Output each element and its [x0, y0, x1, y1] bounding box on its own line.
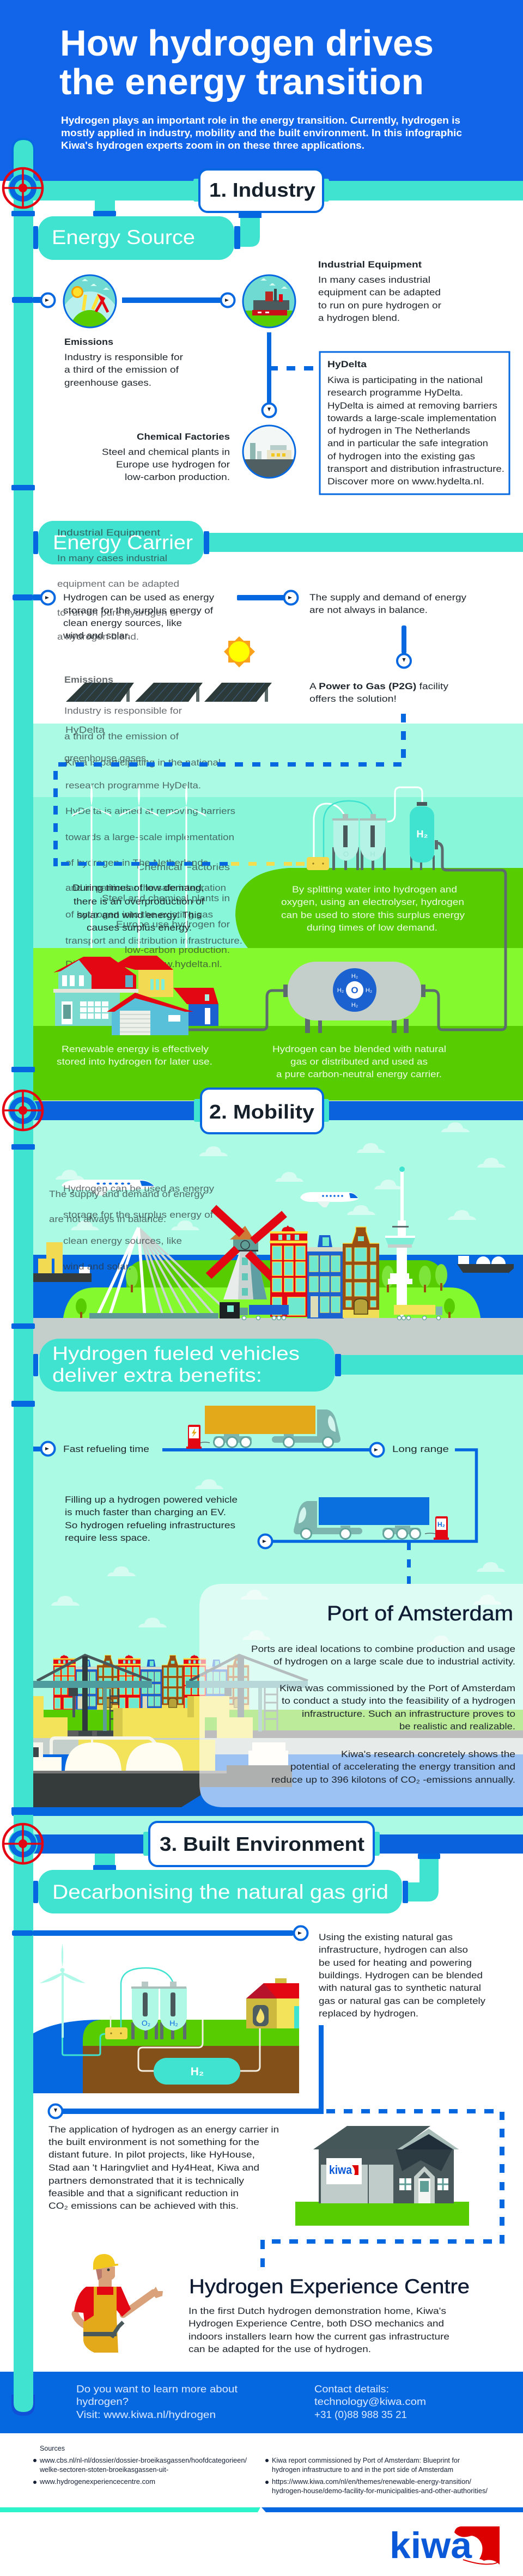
footer text: contact details: technology@kiwa.com: [314, 2396, 426, 2407]
footer text: contact details: +31 (0)88 988 35 21: [314, 2409, 407, 2420]
text: splitting water: oxygen, using an electrolyser, hydrogen: [281, 897, 464, 907]
text: storage for surplus energy: storage for the surplus energy of: [63, 605, 213, 616]
sources: www.cbs.nl/nl-nl/dossier/dossier-broeikasgassen/hoofdcategorieen/: [39, 2456, 247, 2464]
chemical factories text: low-carbon production.: [125, 472, 230, 482]
horizontal teal pipe: industry: [33, 181, 523, 201]
footer text: learn more: hydrogen?: [76, 2396, 129, 2407]
illustration: underground hydrogen system: O₂: [142, 2019, 150, 2027]
chemical factories text: Chemical Factories: [137, 432, 230, 442]
text: filling up: require less space.: [65, 1533, 150, 1543]
pipe to energy carrier: [209, 533, 523, 552]
panel: Port of Amsterdam: to conduct a study into the feasibility of a hydrogen: [282, 1696, 515, 1706]
sources: welke-sectoren-stoten-broeikasgassen-uit-: [39, 2465, 168, 2474]
panel heading: hydrogen fueled vehicles: deliver extra benefits:: [52, 1365, 262, 1386]
electrolyser with hydrogen tank: H₂: [416, 829, 428, 840]
emissions text: a third of the emission of: [64, 364, 179, 375]
illustration: Kiwa hydrogen house: kiwa: [329, 2163, 352, 2177]
electrolyser with hydrogen tank: H: [370, 850, 375, 858]
icon: emissions: [64, 276, 115, 327]
repeated text: emissions and hydelta: Discover more on www.hydelta.nl.: [65, 959, 222, 969]
text: surplus energy: solar and wind energy. This: [77, 910, 202, 920]
overlapping repeated text: industrial equipment: a hydrogen blend.: [57, 631, 139, 642]
footer text: learn more: Do you want to learn more about: [76, 2384, 238, 2395]
chemical factories text: [102, 432, 230, 482]
panel: HyDelta: HyDelta is aimed at removing barriers: [327, 400, 497, 411]
chemical factories text: Europe use hydrogen for: [116, 459, 230, 470]
section heading: 2. Mobility: 2. Mobility: [209, 1101, 314, 1123]
intro text: [61, 115, 462, 151]
text: storage for surplus energy: wind and solar.: [63, 630, 130, 641]
illustration: electric truck with charger: [186, 1406, 340, 1449]
clouds: [56, 1122, 506, 1230]
panel: Port of Amsterdam: Port of Amsterdam: [327, 1602, 513, 1625]
text: existing natural gas infrastructure: gas or natural gas can be completely: [319, 1996, 486, 2006]
sources: Sources: [40, 2444, 65, 2452]
panel heading: hydrogen fueled vehicles: Hydrogen fueled vehicles: [52, 1343, 300, 1364]
text: application in the built environment: The application of hydrogen as an energy carrier in: [48, 2124, 279, 2135]
text: surplus energy: During times of low demand,: [72, 883, 204, 893]
logo: Kiwa: kiwa: [390, 2525, 472, 2566]
text: application in the built environment: distant future. In pilot projects, like HyHouse,: [48, 2149, 255, 2160]
panel heading: Energy Source: [33, 216, 240, 260]
sources: https://www.kiwa.com/nl/en/themes/renewable-energy-transition/: [272, 2477, 471, 2486]
sources: Kiwa report commissioned by Port of Amsterdam: Blueprint for: [272, 2456, 460, 2464]
text: existing natural gas infrastructure: Using the existing natural gas: [319, 1932, 453, 1942]
repeated text over city: are not always in balance.: [49, 1214, 166, 1224]
dashed line to hydrogen house: [260, 2109, 504, 2267]
yellow dashes: [231, 862, 305, 866]
electrolyser with hydrogen tank: O: [343, 850, 349, 858]
repeated text: emissions and hydelta: research programme HyDelta.: [65, 780, 201, 791]
text: existing natural gas infrastructure: be used for heating and powering: [319, 1958, 472, 1968]
mobility background: [33, 1120, 523, 1807]
illustration: Euromast tower: [385, 1167, 415, 1317]
dashed line: solar to electrolyser: [53, 714, 406, 866]
overlapping repeated text: industrial equipment: [57, 527, 179, 642]
panel: Port of Amsterdam: be realistic and realizable.: [399, 1721, 515, 1731]
footer text: contact details: Contact details:: [314, 2384, 389, 2395]
panel: Port of Amsterdam: Kiwa's research concretely shows the: [341, 1749, 515, 1759]
benefit line and nodes: [33, 1442, 476, 1548]
illustration: aeroplanes: [62, 1180, 358, 1207]
repeated text: emissions and hydelta: low-carbon production.: [125, 945, 230, 955]
clouds: [51, 1479, 505, 1645]
emissions text: [64, 337, 183, 388]
section heading: 1. Industry: [193, 169, 329, 212]
benefit labels: Fast refueling time: [63, 1444, 149, 1454]
storage tank: H₂: [351, 973, 358, 980]
valve: mobility: [3, 1091, 42, 1130]
panel: Port of Amsterdam: of hydrogen on a large scale due to industrial activity.: [273, 1656, 515, 1667]
text: existing natural gas infrastructure: buildings. Hydrogen can be blended: [319, 1970, 483, 1980]
panel: HyDelta: [320, 352, 509, 494]
panel heading: Energy Carrier: [33, 521, 209, 564]
text: application in the built environment: feasible and that a significant reduction in: [48, 2188, 239, 2198]
main vertical teal pipe with collars: [11, 138, 35, 2416]
panel heading: Energy Source: Energy Source: [52, 226, 195, 248]
dashed line to port: [407, 1542, 411, 1584]
text: existing natural gas infrastructure: replaced by hydrogen.: [319, 2008, 418, 2019]
repeated text: emissions and hydelta: Emissions: [64, 675, 113, 685]
icon: solar panels: [66, 683, 272, 702]
text: surplus energy: causes surplus energy.: [87, 922, 192, 933]
connector line emissions to equipment: [12, 293, 234, 307]
industrial equipment text: to run on pure hydrogen or: [318, 300, 441, 311]
text: application in the built environment: Stad aan 't Haringvliet and Hy4Heat, Kiwa and: [48, 2162, 259, 2173]
storage tank: H₂: [366, 987, 372, 994]
text: existing natural gas infrastructure: with natural gas to synthetic natural: [318, 1983, 481, 1993]
text: surplus energy: [72, 883, 204, 933]
connector to power to gas: [397, 625, 411, 668]
panel: Port of Amsterdam: [199, 1584, 523, 1807]
icon: industrial equipment: [244, 276, 294, 327]
footer text: learn more: [76, 2384, 238, 2420]
text: stored for later use: [57, 1044, 212, 1067]
header background: [0, 0, 523, 181]
illustration: canal houses: [270, 1225, 379, 1319]
repeated text: emissions and hydelta: [64, 675, 242, 969]
repeated text over city: [49, 1183, 215, 1272]
panel: Port of Amsterdam: potential of accelerating the energy transition and: [290, 1761, 515, 1772]
title: [59, 23, 434, 102]
grey gas pipes: [188, 843, 506, 1030]
text: splitting water: By splitting water into hydrogen and: [292, 884, 457, 895]
panel: Port of Amsterdam: infrastructure. Such an infrastructure proves to: [302, 1709, 515, 1719]
text: demonstration home: In the first Dutch hydrogen demonstration home, Kiwa's: [188, 2306, 446, 2316]
intro text: Hydrogen plays an important role in the energy transition. Currently, hydrogen is: [61, 115, 460, 126]
illustration: underground hydrogen system: H₂: [169, 2019, 178, 2027]
repeated text: emissions and hydelta: and in particular the safe integration: [65, 883, 226, 893]
illustration: ships: [32, 1242, 514, 1282]
band under port: [12, 1807, 523, 1834]
valve: built environment: [3, 1824, 42, 1863]
illustration: city island: [63, 1260, 481, 1318]
text: blended with natural gas: [272, 1044, 446, 1079]
connector line energy carrier: [13, 591, 297, 605]
panel: HyDelta: research programme HyDelta.: [327, 387, 463, 398]
valve: industry: [3, 168, 42, 208]
illustration: worker: [74, 2254, 163, 2353]
illustration: houses: [53, 956, 218, 1035]
repeated text over city: clean energy sources, like: [63, 1236, 182, 1246]
icon: chemical factories: [244, 426, 294, 477]
text: supply and demand: are not always in balance.: [309, 605, 428, 615]
repeated text: emissions and hydelta: Chemical Factories: [137, 862, 230, 872]
repeated text: emissions and hydelta: transport and distribution infrastructure.: [65, 935, 242, 946]
text: filling up: [65, 1494, 238, 1543]
panel: HyDelta: Kiwa is participating in the national: [327, 375, 483, 385]
panel: HyDelta: transport and distribution infrastructure.: [327, 464, 504, 474]
illustration: Erasmus bridge: [89, 1228, 223, 1319]
repeated text: emissions and hydelta: HyDelta is aimed at removing barriers: [65, 806, 235, 816]
horizontal blue pipe: mobility: [33, 1101, 523, 1120]
footer colour bar: [0, 2507, 523, 2512]
heading: Hydrogen Experience Centre: Hydrogen Experience Centre: [189, 2275, 470, 2298]
text: supply and demand: [309, 592, 467, 615]
text: Power to Gas: offers the solution!: [309, 694, 397, 704]
repeated text: emissions and hydelta: of hydrogen into the existing gas: [65, 909, 213, 920]
text: blended with natural gas: a pure carbon-neutral energy carrier.: [276, 1069, 442, 1079]
illustration: trucks on the road: [240, 1305, 442, 1320]
industrial equipment text: a hydrogen blend.: [318, 313, 400, 323]
section heading: 1. Industry: 1. Industry: [209, 179, 315, 201]
illustration: hydrogen truck with pump: H₂: [437, 1521, 445, 1528]
pipe branch to energy source: [93, 201, 262, 247]
repeated text over city: wind and solar.: [63, 1261, 131, 1272]
connector line: [12, 1927, 307, 1940]
horizontal blue pipe: built environment: [33, 1834, 523, 1854]
repeated text: emissions and hydelta: Europe use hydrogen for: [116, 919, 230, 929]
panel: HyDelta: HyDelta: [327, 359, 367, 369]
text: stored for later use: stored into hydrogen for later use.: [57, 1056, 212, 1067]
text: storage for surplus energy: clean energy sources, like: [63, 618, 182, 628]
repeated text over city: storage for the surplus energy of: [63, 1210, 213, 1220]
panel heading: Decarbonising the natural gas grid: Decarbonising the natural gas grid: [52, 1881, 388, 1903]
text: application in the built environment: the built environment is not something for the: [48, 2137, 259, 2147]
panel: HyDelta: of hydrogen in The Netherlands: [327, 426, 470, 436]
section heading: 3. Built Environment: 3. Built Environment: [160, 1833, 364, 1855]
repeated text: emissions and hydelta: Industry is responsible for: [64, 706, 182, 716]
text: filling up: Filling up a hydrogen powered vehicle: [65, 1494, 238, 1505]
storage tank: [283, 962, 425, 1033]
overlapping repeated text: industrial equipment: to run on pure hydrogen or: [57, 607, 179, 618]
illustration: hydrogen truck with pump: [294, 1497, 449, 1540]
panel: HyDelta: towards a large-scale implementation: [327, 413, 496, 423]
sources: hydrogen-house/demo-facility-for-municipalities-and-other-authorities/: [272, 2487, 488, 2495]
repeated text: emissions and hydelta: Kiwa is participating in the national: [65, 757, 221, 768]
panel heading: Decarbonising the natural gas grid: [33, 1870, 408, 1913]
text: filling up: is much faster than charging an EV.: [65, 1507, 226, 1517]
industrial equipment text: equipment can be adapted: [318, 287, 441, 297]
emissions text: Emissions: [64, 337, 113, 347]
text: blended with natural gas: gas or distributed and used as: [290, 1056, 428, 1067]
emissions text: Industry is responsible for: [64, 352, 183, 362]
sources: www.hydrogenexperiencecentre.com: [39, 2477, 155, 2486]
text: surplus energy: there is an overproduction of: [74, 896, 204, 907]
text: demonstration home: [188, 2306, 449, 2354]
illustration: Kiwa hydrogen house: [295, 2126, 469, 2226]
text: application in the built environment: partners demonstrated that it is technically: [48, 2176, 245, 2186]
industrial equipment text: Industrial Equipment: [318, 259, 422, 270]
title: How hydrogen drives: [60, 23, 434, 64]
text: stored for later use: Renewable energy is effectively: [62, 1044, 209, 1054]
text: demonstration home: indoors installers learn how the current gas infrastructure: [188, 2331, 449, 2342]
icons: wind turbines: [71, 783, 206, 948]
storage tank: H₂: [351, 1002, 358, 1008]
panel: HyDelta: of hydrogen into the existing gas: [327, 451, 475, 461]
connector loop: [49, 2025, 324, 2118]
sources: hydrogen infrastructure to and in the port side of Amsterdam: [272, 2465, 453, 2474]
panel heading: hydrogen fueled vehicles: [33, 1339, 341, 1392]
illustration: windmill: [209, 1208, 284, 1319]
text: demonstration home: can be adapted for the use of hydrogen.: [188, 2344, 371, 2354]
panel: Port of Amsterdam: Kiwa was commissioned by the Port of Amsterdam: [279, 1683, 515, 1693]
emissions text: greenhouse gases.: [64, 378, 151, 388]
icon: sun: [224, 636, 255, 667]
connector to chemical factories: [263, 332, 276, 417]
text: splitting water: can be used to store this surplus energy: [281, 910, 465, 920]
storage tank: O: [351, 985, 358, 995]
electrolyser with hydrogen tank: [307, 787, 438, 870]
text: splitting water: during times of low demand.: [307, 922, 437, 933]
benefit labels: Long range: [392, 1444, 449, 1454]
energy carrier background bands: [33, 724, 523, 1101]
text: application in the built environment: [48, 2124, 279, 2211]
panel heading: Energy Carrier: Energy Carrier: [53, 531, 193, 554]
repeated text over city: Hydrogen can be used as energy: [63, 1183, 215, 1194]
repeated text: emissions and hydelta: Steel and chemical plants in: [102, 893, 230, 903]
repeated text: emissions and hydelta: HyDelta: [65, 725, 105, 735]
repeated text: emissions and hydelta: towards a large-scale implementation: [65, 832, 234, 842]
text: supply and demand: The supply and demand of energy: [309, 592, 467, 603]
section heading: 3. Built Environment: [143, 1822, 380, 1866]
title: the energy transition: [59, 62, 424, 102]
footer text: contact details: [314, 2384, 426, 2420]
illustration: underground hydrogen system: H₂: [191, 2065, 204, 2078]
text: storage for surplus energy: Hydrogen can be used as energy: [63, 592, 215, 603]
text: blended with natural gas: Hydrogen can be blended with natural: [272, 1044, 446, 1054]
text: existing natural gas infrastructure: [318, 1932, 486, 2019]
text: demonstration home: Hydrogen Experience Centre, both DSO mechanics and: [188, 2318, 444, 2329]
text: existing natural gas infrastructure: infrastructure, hydrogen can also: [319, 1945, 468, 1955]
overlapping repeated text: industrial equipment: equipment can be adapted: [57, 579, 179, 589]
overlapping repeated text: industrial equipment: In many cases industrial: [57, 553, 167, 563]
footer text: learn more: Visit: www.kiwa.nl/hydrogen: [76, 2409, 216, 2420]
text: filling up: So hydrogen refueling infrastructures: [65, 1520, 235, 1530]
repeated text over city: The supply and demand of energy: [49, 1189, 205, 1199]
text: Power to Gas: A Power to Gas (P2G) facility: [309, 681, 449, 691]
illustration: port scene: [33, 1655, 523, 1809]
sources: [33, 2444, 488, 2495]
dashes to HyDelta: [271, 366, 313, 370]
illustration: underground hydrogen system: [33, 1943, 299, 2093]
panel: HyDelta: and in particular the safe integration: [327, 438, 488, 448]
panel: HyDelta: Discover more on www.hydelta.nl.: [327, 476, 484, 487]
overlapping repeated text: industrial equipment: Industrial Equipment: [57, 527, 160, 538]
industrial equipment text: In many cases industrial: [318, 275, 430, 285]
section heading: 2. Mobility: [194, 1089, 329, 1133]
text: Power to Gas: [309, 681, 449, 704]
storage tank: H₂: [337, 987, 344, 994]
intro text: mostly applied in industry, mobility and the built environment. In this infographic: [61, 127, 462, 138]
text: application in the built environment: CO₂ emissions can be achieved with this.: [48, 2201, 239, 2211]
pipe branches to decarbonising: [93, 1854, 440, 1901]
pipe to vehicles panel: [341, 1355, 523, 1375]
panel: Port of Amsterdam: Ports are ideal locations to combine production and usage: [251, 1644, 515, 1654]
benefit labels: [63, 1444, 449, 1454]
text: storage for surplus energy: [63, 592, 215, 641]
panel: Port of Amsterdam: reduce up to 396 kilotons of CO₂ -emissions annually.: [271, 1775, 515, 1785]
repeated text: emissions and hydelta: of hydrogen in The Netherlands: [65, 858, 208, 868]
repeated text: emissions and hydelta: a third of the emission of: [64, 731, 179, 742]
intro text: Kiwa's hydrogen experts zoom in on these three applications.: [61, 140, 364, 151]
footer panel: [0, 2372, 523, 2433]
repeated text: emissions and hydelta: greenhouse gases.: [64, 753, 149, 763]
text: splitting water: [281, 884, 465, 933]
industrial equipment text: [318, 259, 441, 323]
chemical factories text: Steel and chemical plants in: [102, 447, 230, 457]
